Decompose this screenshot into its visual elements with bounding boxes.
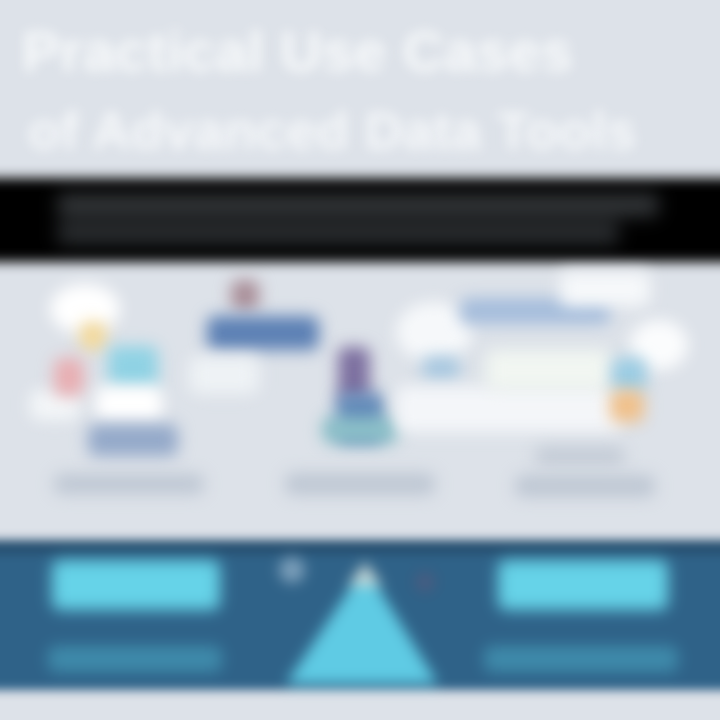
banner text line 2 [58, 222, 618, 244]
banner text [50, 184, 666, 252]
panel: bottom band [0, 540, 720, 690]
title line 2: of Advanced Data Tools [28, 102, 637, 161]
title [22, 20, 637, 161]
left label [51, 413, 207, 500]
icon: left cluster [28, 280, 168, 423]
black banner [0, 178, 720, 262]
icon: right diagram [386, 260, 691, 436]
band top shade [0, 540, 720, 554]
icon: centre top figure [188, 271, 330, 394]
icon: centre figure [312, 336, 406, 456]
right caption [484, 646, 678, 672]
icon: pyramid [272, 550, 442, 693]
left caption [48, 646, 222, 672]
title line 1: Practical Use Cases [22, 20, 573, 84]
panel: illustrations [28, 260, 691, 502]
centre label [285, 473, 435, 495]
right label [512, 442, 658, 502]
banner text line 1 [58, 194, 658, 216]
left button [52, 560, 220, 610]
right button [498, 560, 668, 610]
